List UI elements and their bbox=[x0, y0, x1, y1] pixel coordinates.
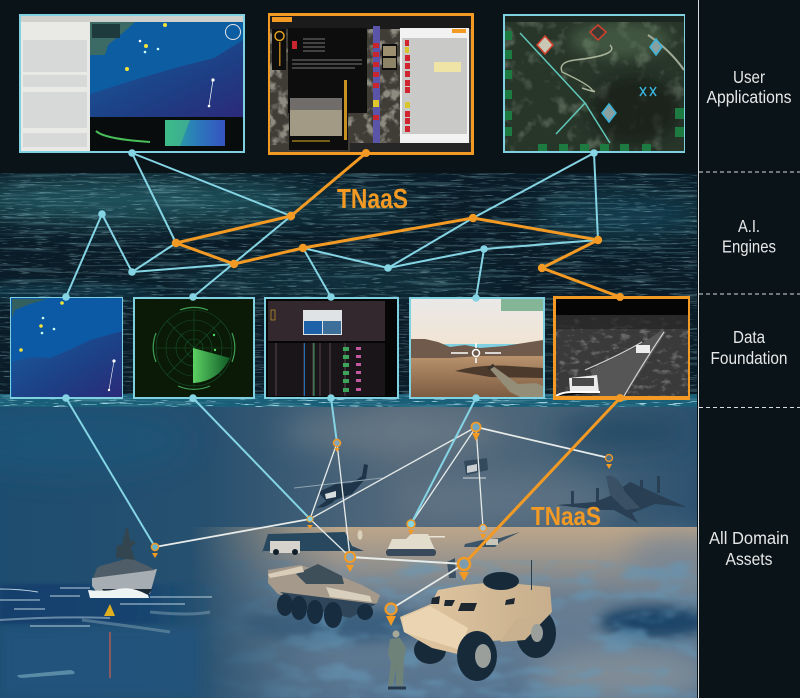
label: User Applications: Applications bbox=[706, 87, 792, 107]
icon: yellow buoy bbox=[104, 604, 115, 678]
icon: dismounted soldier bbox=[447, 558, 456, 578]
sidebar divider bbox=[698, 0, 699, 698]
icon: command tent and truck bbox=[262, 530, 364, 555]
pin: warship bbox=[152, 544, 158, 558]
pin: armored truck bbox=[458, 558, 470, 581]
hot vehicles bbox=[569, 345, 650, 392]
icon: transport helicopter bbox=[463, 458, 488, 478]
tank gun barrel bbox=[488, 365, 543, 397]
network connections: thin white asset links bbox=[155, 427, 609, 609]
panel: user application 1 sonar map bbox=[19, 14, 245, 153]
network connections: cyan links bbox=[66, 153, 598, 547]
gauge panel bbox=[272, 29, 286, 70]
pin: transport helicopter bbox=[472, 422, 480, 441]
pin: helicopter bbox=[334, 440, 340, 452]
panel: A.I. engines data-stream background bbox=[0, 173, 710, 407]
label: All Domain Assets: Assets bbox=[726, 549, 773, 569]
label: All Domain Assets: All Domain bbox=[709, 528, 789, 548]
radar scope bbox=[156, 310, 232, 386]
pin: tank bbox=[407, 520, 415, 535]
icon: patrol aircraft bbox=[557, 476, 686, 523]
icon: submarine bbox=[18, 670, 74, 678]
panel: user application 2 search console bbox=[268, 13, 474, 155]
label: A.I. Engines: Engines bbox=[722, 236, 776, 256]
network nodes: cyan bbox=[62, 149, 598, 402]
sea and waves bbox=[0, 584, 212, 698]
panel: data foundation 1 bathymetry bbox=[10, 297, 123, 399]
top bar bbox=[270, 16, 471, 29]
sea map bbox=[90, 22, 243, 117]
results list bbox=[400, 28, 469, 143]
status bar bbox=[350, 143, 471, 152]
asset location pins bbox=[152, 422, 612, 626]
label: Data Foundation: Foundation bbox=[710, 348, 788, 368]
pin: command post bbox=[307, 516, 313, 529]
label: User Applications: User bbox=[733, 67, 765, 87]
panel: data foundation 5 thermal view bbox=[553, 296, 690, 400]
pin: patrol aircraft bbox=[606, 454, 612, 469]
panel: all domain assets battlefield scene bbox=[0, 406, 735, 698]
sonar image card bbox=[303, 310, 342, 335]
heading: TNaaS lower: TNaaS bbox=[531, 501, 601, 531]
panel: data foundation 3 signal display bbox=[264, 297, 399, 399]
pin: soldier bbox=[386, 604, 396, 626]
mountains bbox=[411, 339, 543, 358]
side controls bbox=[23, 40, 87, 147]
label: Data Foundation: Data bbox=[733, 327, 765, 347]
status overlay bbox=[501, 299, 543, 311]
icon: artillery vehicle bbox=[464, 532, 520, 547]
panel: data foundation 2 radar bbox=[133, 297, 255, 399]
event detail panel bbox=[288, 28, 367, 113]
unit markers bbox=[537, 25, 662, 122]
icon: helicopter bbox=[294, 464, 382, 508]
desert ground bbox=[199, 524, 697, 698]
road bbox=[590, 330, 666, 396]
sonar chart bbox=[90, 117, 243, 151]
panel: user application 3 tactical map bbox=[503, 14, 685, 153]
app toolbar bbox=[21, 16, 243, 22]
heading: TNaaS upper: TNaaS bbox=[337, 183, 408, 214]
targeting reticle bbox=[451, 343, 501, 363]
signal traces bbox=[276, 343, 345, 396]
label: A.I. Engines: A.I. bbox=[738, 216, 760, 236]
map buttons bbox=[505, 31, 684, 152]
thumbnails bbox=[382, 44, 397, 70]
panel: data foundation 4 gunner view bbox=[409, 297, 545, 399]
icon: eight-wheeled armored vehicle bbox=[268, 564, 380, 628]
network connections: orange TNaaS links bbox=[176, 153, 620, 564]
icon: main battle tank bbox=[386, 534, 445, 556]
icon: warship bbox=[88, 528, 157, 598]
icon: soldier bbox=[388, 630, 406, 688]
network nodes: orange bbox=[172, 149, 624, 402]
route lines bbox=[520, 33, 610, 143]
route strip bbox=[373, 26, 380, 144]
sky backdrop bbox=[0, 407, 697, 698]
pin: armored vehicle bbox=[345, 552, 355, 572]
icon: tactical armored truck bbox=[400, 560, 556, 681]
image panel bbox=[289, 80, 348, 150]
pin: artillery bbox=[480, 524, 486, 539]
